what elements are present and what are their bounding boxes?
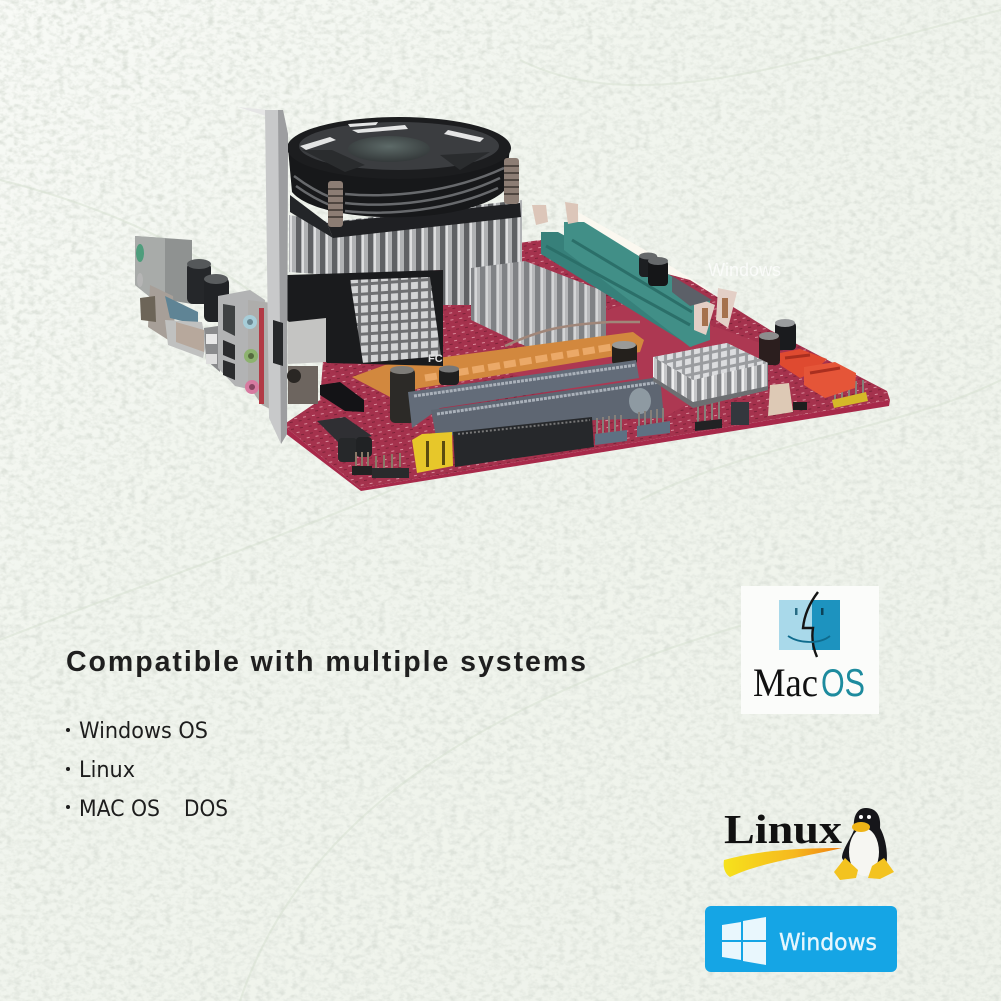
RAM slot clips (532, 205, 548, 225)
orange PCIe slot (352, 332, 644, 423)
metal bracket (265, 110, 288, 444)
pin headers (595, 380, 868, 445)
faint windows watermark: Windows (708, 260, 781, 280)
USB stack (204, 326, 220, 372)
card bracket tip (238, 107, 272, 118)
Mac OS logo (741, 586, 879, 714)
Windows logo badge (705, 906, 897, 972)
memory controller chip and capacitors (317, 382, 409, 478)
circuit board (283, 240, 890, 488)
capacitors on board (639, 252, 796, 365)
Linux logo: Linux (724, 806, 843, 852)
list item: MAC OS and DOS: DOS (184, 797, 228, 822)
list item: MAC OS and DOS: MAC OS (79, 797, 160, 822)
list item: Windows OS: Windows OS (79, 719, 208, 744)
PCIe network card: FC (428, 353, 443, 365)
fan hub (348, 136, 430, 162)
list item: Linux: Linux (79, 758, 135, 783)
Mac OS logo: OS (821, 662, 865, 705)
Mac OS logo: Mac (753, 660, 818, 705)
card heat sink (350, 277, 441, 363)
Linux logo (724, 806, 894, 880)
right chipset heat sink (653, 343, 768, 408)
capacitors beside ports (187, 262, 211, 304)
fan frame with slats (288, 148, 510, 217)
RAM slots (532, 202, 737, 347)
PCIe network card (238, 107, 443, 444)
icon: finder face (779, 592, 840, 657)
VGA port (165, 320, 206, 358)
icon: windows panes (722, 917, 766, 965)
PS/2 port block (135, 236, 192, 304)
mounting screws (328, 181, 343, 227)
large chipset heat sink (471, 261, 640, 353)
motherboard illustration (135, 107, 890, 491)
fan slots (300, 122, 484, 150)
Windows logo badge: Windows (779, 930, 877, 956)
CPU heat sink (289, 195, 522, 305)
red SATA connectors (780, 349, 856, 398)
yellow swoosh (724, 848, 842, 877)
grey PCI slots (408, 360, 664, 437)
yellow power connector (412, 432, 453, 473)
icon: tux penguin (834, 808, 894, 880)
LAN and USB block (218, 290, 265, 392)
cooling fan (287, 117, 519, 227)
compatibility list (66, 719, 228, 822)
list item: MAC OS and DOS (66, 797, 228, 822)
rear I/O ports (135, 236, 272, 410)
audio jacks (248, 300, 272, 410)
serial port (148, 285, 176, 345)
heading: Compatible with multiple systems (66, 646, 586, 678)
white connector behind RAM (578, 212, 712, 300)
card circuit board (287, 270, 443, 366)
IDE connector (453, 417, 594, 467)
network port (288, 318, 326, 364)
